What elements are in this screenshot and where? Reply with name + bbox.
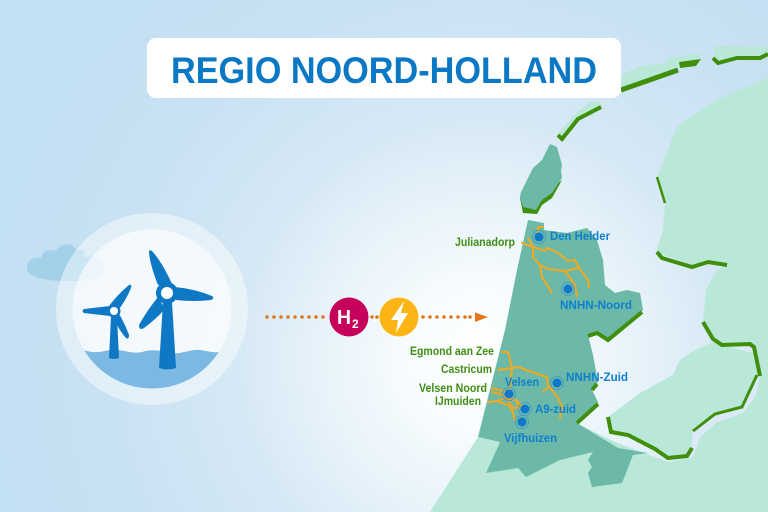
coast edge: eastern mainland bbox=[608, 177, 760, 458]
label: A9-zuid: A9-zuid bbox=[535, 402, 576, 416]
label: Egmond aan Zee: Egmond aan Zee bbox=[410, 346, 494, 358]
large turbine bbox=[139, 250, 213, 370]
water: sliver around Flevoland bbox=[655, 353, 760, 462]
small turbine bbox=[82, 285, 131, 359]
label: Vijfhuizen: Vijfhuizen bbox=[504, 431, 557, 445]
icon: cloud bbox=[27, 244, 104, 281]
icon: electricity bolt bbox=[380, 298, 418, 336]
station: Velsen bbox=[502, 388, 516, 400]
title panel bbox=[147, 38, 621, 98]
icon: hydrogen H2: 2 bbox=[352, 317, 359, 331]
water: inner bay sliver bbox=[722, 345, 753, 353]
island: Ameland bbox=[713, 46, 768, 62]
island edges bbox=[558, 54, 768, 139]
station: Vijfhuizen bbox=[516, 416, 528, 428]
label: IJmuiden: IJmuiden bbox=[435, 396, 481, 408]
label: NNHN-Zuid: NNHN-Zuid bbox=[566, 370, 628, 384]
land: south Holland coast bbox=[430, 437, 650, 512]
dotted arrow: left segment bbox=[265, 315, 379, 319]
wind turbine illustration bbox=[56, 213, 248, 405]
map: surrounding land bbox=[430, 77, 768, 512]
label: Velsen: Velsen bbox=[505, 375, 539, 389]
map: Noord-Holland bbox=[478, 220, 648, 487]
network: north lines bbox=[522, 227, 589, 296]
map: Texel bbox=[520, 144, 562, 214]
map: Wadden islands bbox=[557, 46, 768, 140]
inner disc bbox=[72, 230, 232, 388]
icon: hydrogen H2 bbox=[330, 298, 368, 336]
outer halo bbox=[56, 213, 248, 405]
label: Castricum: Castricum bbox=[441, 364, 492, 376]
island: Terschelling bbox=[621, 53, 702, 88]
label: Velsen Noord: Velsen Noord bbox=[419, 383, 487, 395]
label: NNHN-Noord: NNHN-Noord bbox=[560, 298, 632, 312]
station: Den Helder bbox=[532, 230, 546, 244]
island: Vlieland bbox=[557, 101, 602, 140]
station: NNHN-Noord bbox=[562, 282, 574, 296]
station: NNHN-Zuid bbox=[550, 376, 564, 390]
title text: REGIO NOORD-HOLLAND bbox=[171, 50, 597, 91]
label: Julianadorp: Julianadorp bbox=[455, 237, 515, 249]
land: Friesland and eastern mainland bbox=[430, 77, 768, 512]
coast edge: Noord-Holland bbox=[577, 312, 642, 423]
network: south lines bbox=[488, 352, 562, 420]
water bbox=[84, 350, 219, 388]
arrow: right segment with head bbox=[421, 312, 488, 322]
label: Den Helder: Den Helder bbox=[550, 229, 610, 243]
icon: hydrogen H2: H bbox=[337, 307, 351, 329]
land: Flevoland bbox=[608, 342, 757, 458]
station: A9-zuid bbox=[518, 402, 532, 416]
